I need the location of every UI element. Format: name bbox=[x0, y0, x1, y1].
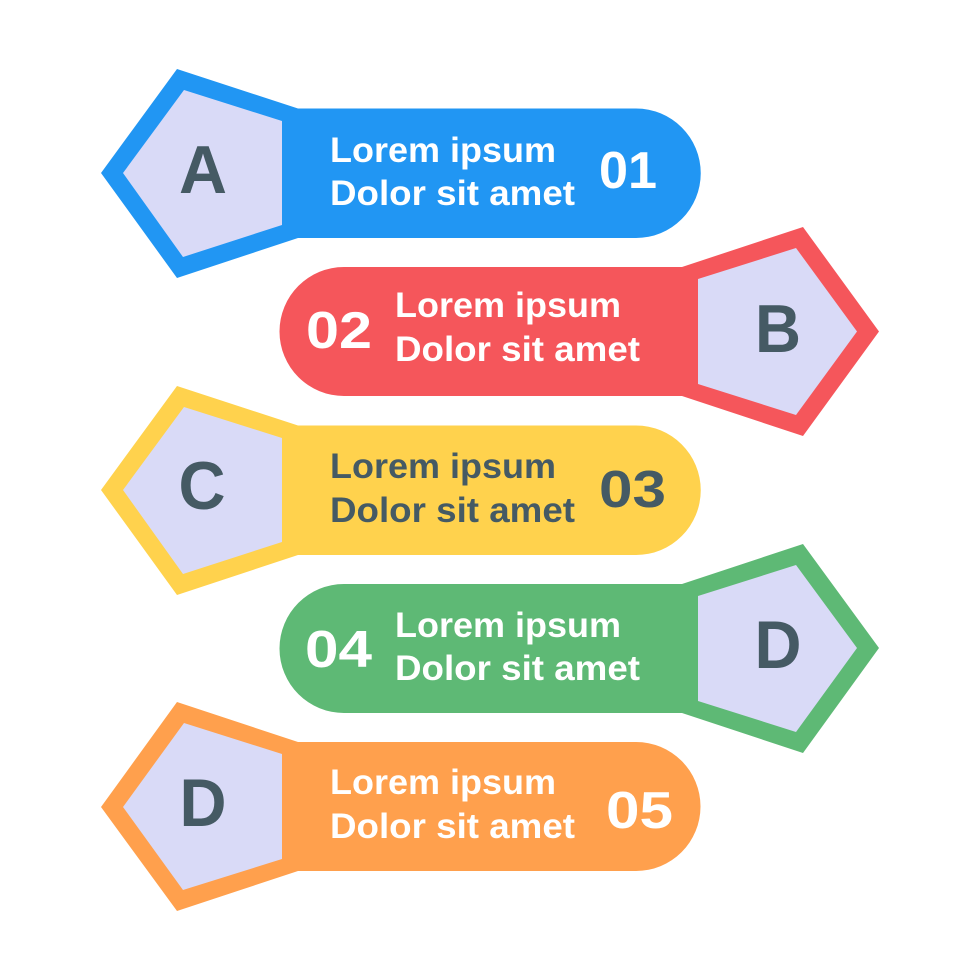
text block A bbox=[330, 131, 575, 213]
text block C: Dolor sit amet bbox=[330, 491, 575, 530]
panel: row D green bbox=[280, 544, 879, 753]
text block E: Lorem ipsum bbox=[330, 763, 556, 802]
text block E: Dolor sit amet bbox=[330, 807, 575, 846]
blue banner shape bbox=[101, 69, 701, 278]
text block A: Lorem ipsum bbox=[330, 131, 556, 170]
panel: row C yellow bbox=[101, 386, 701, 595]
panel: row E orange bbox=[101, 702, 700, 911]
text block E bbox=[330, 763, 575, 846]
number 03: 03 bbox=[599, 461, 666, 519]
number 02: 02 bbox=[306, 302, 372, 360]
text block B: Lorem ipsum bbox=[395, 286, 621, 325]
orange banner shape bbox=[101, 702, 700, 911]
text block D bbox=[395, 606, 640, 688]
text block D: Dolor sit amet bbox=[395, 649, 640, 688]
text block B bbox=[395, 286, 640, 369]
pentagon D inner, orange row bbox=[123, 723, 282, 890]
text block A: Dolor sit amet bbox=[330, 174, 575, 213]
pentagon A inner bbox=[123, 90, 282, 257]
letter B: B bbox=[755, 291, 801, 367]
yellow banner shape bbox=[101, 386, 701, 595]
number 05: 05 bbox=[606, 782, 673, 840]
pentagon B inner bbox=[698, 248, 857, 415]
pentagon D inner bbox=[698, 565, 857, 732]
text block B: Dolor sit amet bbox=[395, 330, 640, 369]
panel: row B red bbox=[280, 227, 879, 436]
red banner shape bbox=[280, 227, 879, 436]
letter D, orange row: D bbox=[180, 765, 226, 841]
number 01: 01 bbox=[599, 142, 657, 200]
green banner shape bbox=[280, 544, 879, 753]
panel: row A blue bbox=[101, 69, 701, 278]
text block D: Lorem ipsum bbox=[395, 606, 621, 645]
letter D: D bbox=[754, 607, 802, 683]
letter C: C bbox=[178, 448, 226, 524]
pentagon C inner bbox=[123, 407, 282, 574]
letter A: A bbox=[179, 132, 227, 208]
number 04: 04 bbox=[305, 621, 372, 679]
text block C: Lorem ipsum bbox=[330, 447, 556, 486]
text block C bbox=[330, 447, 575, 530]
